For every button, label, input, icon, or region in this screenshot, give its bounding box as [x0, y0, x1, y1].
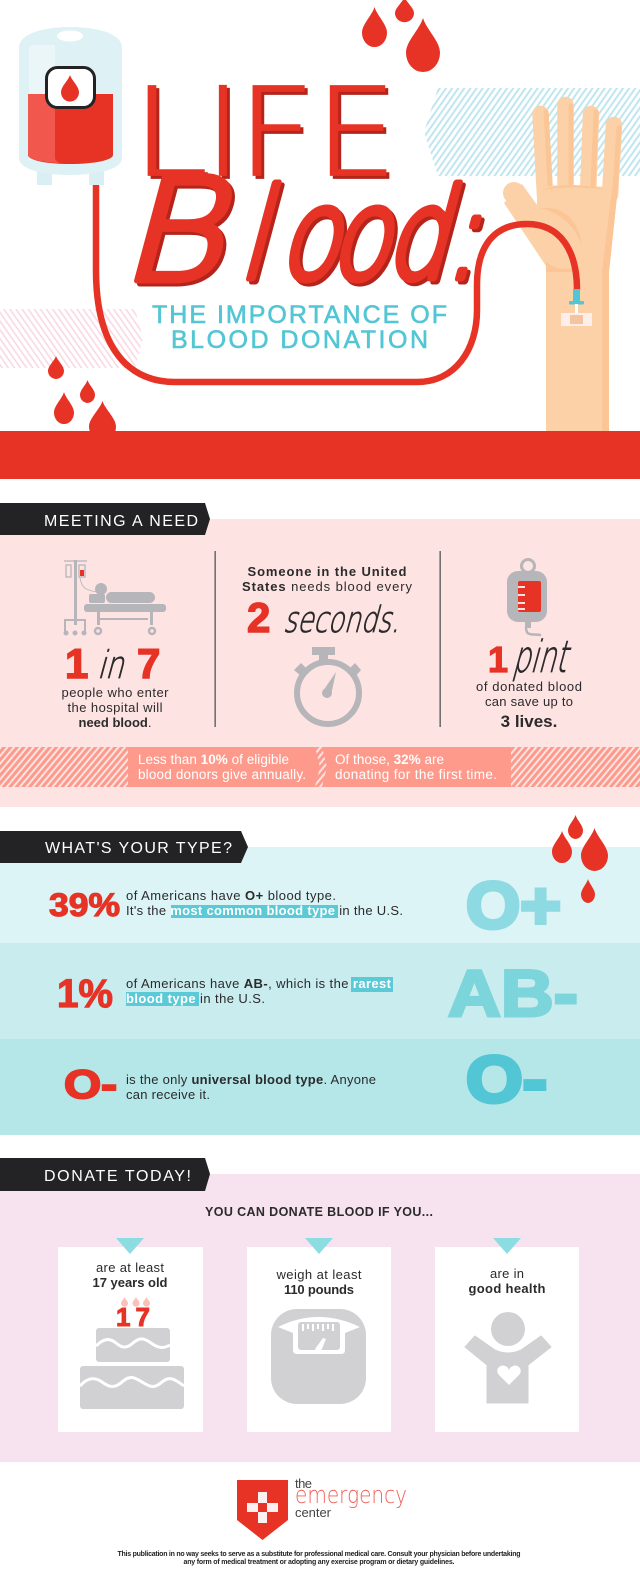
card: health — [435, 1238, 579, 1432]
stat: 2 seconds — [247, 594, 408, 641]
title: Blood script: lood: — [233, 166, 510, 312]
title: LIFE: L — [135, 65, 211, 207]
title: LIFE: F — [240, 65, 318, 207]
text: of donated blood: of donated blood — [476, 679, 582, 694]
row: O-: can receive it. — [126, 1087, 210, 1102]
icon: needle and bandage — [561, 289, 592, 326]
title: LIFE: F — [237, 62, 315, 204]
text: of donated blood — [476, 679, 582, 731]
heading: donate today — [0, 1158, 210, 1191]
stat: 1 pint: 1 — [488, 639, 508, 680]
icon: drops over type panel — [552, 815, 608, 903]
heading: meeting a need — [0, 503, 210, 535]
logo: the emergency center: emergency — [295, 1481, 407, 1509]
callout band: annual donors: Less than 10% of eligible — [138, 752, 289, 767]
row: O-: O- — [64, 1063, 117, 1107]
text: someone needs blood: Someone in the United — [248, 564, 407, 579]
stat: 2 seconds: seconds. — [281, 599, 408, 641]
hatch background: right — [424, 88, 640, 176]
row: O-: O- — [466, 1042, 547, 1116]
card: health: are in — [490, 1266, 524, 1281]
text: someone needs blood — [242, 564, 412, 594]
row: O+: of Americans have O+ blood type. — [126, 888, 336, 903]
row: AB-: AB- — [448, 956, 578, 1030]
icon: hospital bed — [64, 560, 166, 636]
text: people who enter: the hospital will — [68, 700, 163, 715]
subheading: YOU CAN DONATE BLOOD IF YOU... — [205, 1205, 433, 1219]
callout band: annual donors: donating for the first time. — [335, 767, 497, 782]
stat: 1 in 7: 1 — [65, 640, 88, 687]
row: AB-: of Americans have AB-, which is the rarest — [126, 976, 392, 991]
disclaimer: any form of medical treatment or adopting any exercise program or dietary guidelines. — [184, 1559, 455, 1566]
card: age: 17 years old — [92, 1275, 168, 1290]
card: weight — [247, 1238, 391, 1432]
callout band: annual donors — [0, 747, 640, 787]
icon: cake — [80, 1297, 184, 1409]
row: O+: 39% — [49, 887, 120, 923]
icon: scale — [271, 1309, 366, 1404]
text: people who enter: need blood. — [79, 715, 151, 730]
icon: pint bag — [507, 560, 547, 635]
icon: cake: 17 — [116, 1302, 150, 1332]
card: age: are at least — [96, 1260, 164, 1275]
title: LIFE: L — [132, 62, 208, 204]
icon: blood bag — [19, 27, 122, 185]
subtitle: THE IMPORTANCE OF — [152, 301, 447, 329]
title: Blood script: lood: — [230, 163, 507, 309]
stat: 1 in 7: 7 — [137, 640, 160, 687]
panel: meeting a need — [0, 519, 640, 807]
row: O-: is the only universal blood type. Anyone — [126, 1072, 376, 1087]
disclaimer — [118, 1551, 520, 1566]
stat: 1 in 7 — [65, 640, 160, 688]
row: O+: It's the most common blood type in the U.S. — [126, 903, 403, 918]
logo: the emergency center: the — [295, 1476, 312, 1491]
panel: donate today — [0, 1174, 640, 1462]
disclaimer: This publication in no way seeks to serve as a substitute for professional medical care. Consult your physician before undertaking — [118, 1551, 520, 1558]
title: LIFE: E — [318, 65, 400, 207]
stat: 1 in 7: in — [94, 644, 132, 688]
card: age — [58, 1238, 203, 1432]
title: Blood script — [110, 148, 510, 317]
row: AB-: 1% — [57, 972, 113, 1016]
title: Blood script: B — [113, 151, 259, 317]
stat: 1 pint: pint — [509, 631, 577, 683]
icon: raised hand — [503, 105, 619, 431]
logo: the emergency center — [237, 1476, 407, 1540]
text: of donated blood: 3 lives. — [501, 712, 557, 731]
title: LIFE: I — [205, 62, 241, 204]
title: LIFE: E — [315, 62, 397, 204]
red floor band — [0, 431, 640, 479]
row: O+ — [49, 868, 561, 942]
logo: the emergency center: center — [295, 1505, 332, 1520]
text: people who enter — [62, 685, 169, 730]
hatch background: left — [0, 309, 143, 368]
text: someone needs blood: States needs blood every — [242, 579, 412, 594]
row: O+: O+ — [466, 868, 561, 942]
row: AB-: blood type in the U.S. — [126, 991, 265, 1006]
stat: 2 seconds: 2 — [247, 594, 270, 641]
panel: what's your type — [0, 847, 640, 1135]
card: weight: weigh at least — [276, 1267, 362, 1282]
icon: falling drops top — [362, 0, 440, 72]
stat: 1 pint — [488, 631, 577, 683]
title: LIFE: I — [208, 65, 244, 207]
title: Blood script: B — [110, 148, 256, 314]
text: people who enter: people who enter — [62, 685, 169, 700]
heading: what's your type — [0, 831, 248, 863]
card: health: good health — [468, 1281, 546, 1296]
title: LIFE — [132, 62, 400, 207]
icon: stopwatch — [294, 647, 361, 724]
row: O- — [64, 1042, 547, 1116]
tube from bag to arm — [96, 184, 577, 382]
row: AB- — [57, 956, 578, 1030]
icon: person with heart — [465, 1312, 551, 1403]
subtitle — [152, 301, 447, 354]
heading: what's your type: WHAT'S YOUR TYPE? — [45, 840, 232, 857]
text: of donated blood: can save up to — [485, 694, 573, 709]
callout band: annual donors: blood donors give annually. — [138, 767, 306, 782]
heading: donate today: DONATE TODAY! — [44, 1168, 191, 1185]
subtitle: BLOOD DONATION — [171, 326, 428, 354]
heading: meeting a need: MEETING A NEED — [44, 513, 198, 530]
icon: falling drops lower left — [48, 356, 116, 441]
card: weight: 110 pounds — [284, 1282, 354, 1297]
callout band: annual donors: Of those, 32% are — [335, 752, 444, 767]
